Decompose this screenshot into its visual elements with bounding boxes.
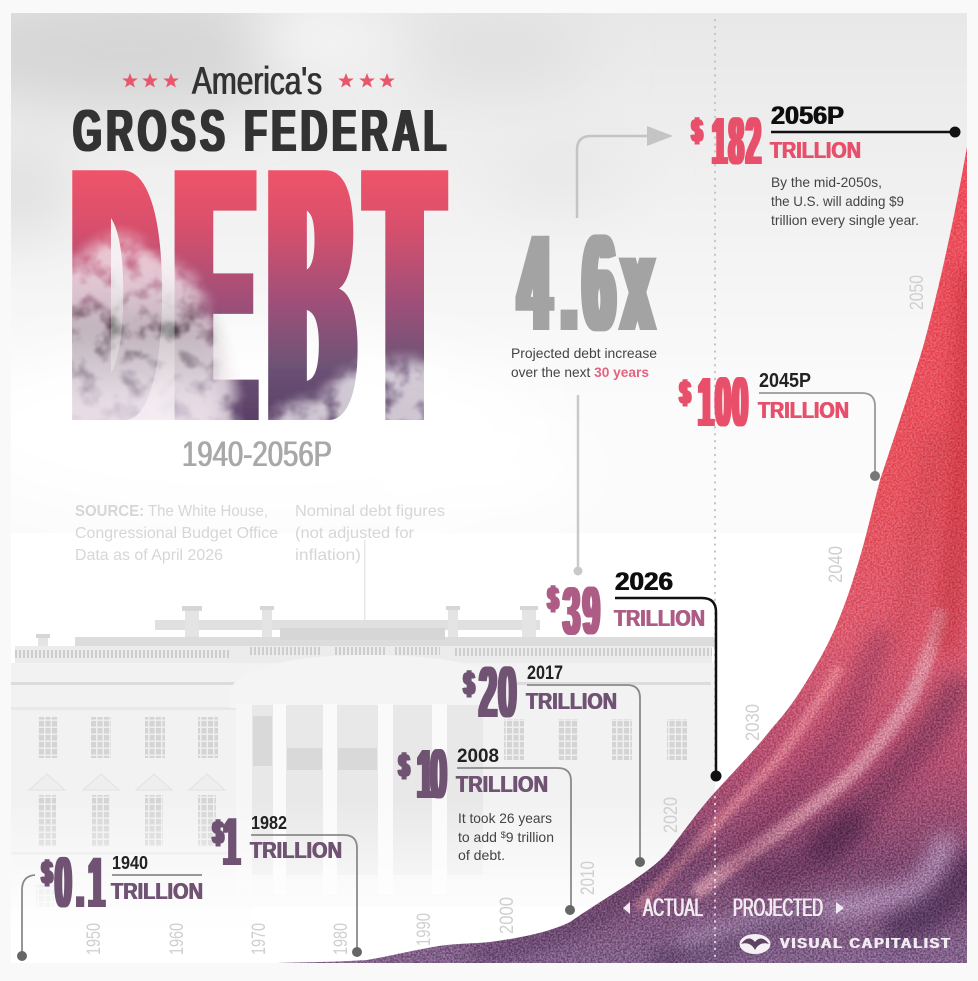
data point: 2045P: $ [680,374,690,411]
data point: 2026: $ [548,580,558,617]
divider: actual vs projected dotted line [714,20,716,962]
subtitle: date range: 1940-2056P [182,435,332,474]
axis year labels: 2020 [661,797,682,833]
logo: visual capitalist: VISUAL CAPITALIST [780,936,950,952]
axis year labels: 1980 [331,923,352,955]
nominal figures note: (not adjusted for [295,525,415,542]
data point: 1940: 0.1 [55,843,105,923]
data point: 2008: 10 [417,735,447,814]
heading: DEBT: DEBT [77,91,438,497]
data point: 2056P: trillion every single year. [771,212,919,228]
data point: 2008: of debt. [458,847,505,863]
data point: 2008: TRILLION [456,771,548,797]
title block [72,66,448,466]
data point: 1940: TRILLION [111,878,203,904]
data point: 2026 [548,568,722,782]
icon: right stars [338,73,395,88]
nominal figures note: inflation) [295,547,361,564]
data point: 2056P: 182 [712,104,761,178]
data point: 2056P: By the mid-2050s, [771,174,882,190]
data point: 2008: to add [458,829,497,845]
axis year labels: 2030 [743,704,764,741]
nominal figures note [295,503,445,564]
callout: 4.6x growth with arrow [511,126,673,576]
data point: 2017: 2017 [527,662,563,684]
legend: actual and projected: PROJECTED [733,894,823,922]
data point: 2056P: 2056P [771,102,844,130]
data point: 1940 [17,856,202,961]
data point: 1940: 1940 [112,852,148,873]
data point: 2045P: 100 [698,364,748,442]
caption: over the next 30 years [511,364,649,380]
data point: 2008: 2008 [457,745,499,767]
data point: 2008: It took 26 years [458,810,552,826]
data point: 2008 [399,735,575,915]
data point: 1982: $ [213,814,223,851]
icon: left stars [122,73,179,88]
heading: gross federal: GROSS FEDERAL [73,97,451,164]
data point: 2056P: TRILLION [770,137,861,163]
data point: 2056P [692,102,960,228]
data point: 2026: 39 [563,573,600,649]
data point: 2026: TRILLION [614,605,705,631]
sky background with clouds [11,13,967,264]
nominal figures note: Nominal debt figures [295,503,445,520]
axis year labels: 2000 [497,897,518,934]
data point: 2008: $ [399,747,409,784]
axis year labels: 1990 [414,913,435,946]
caption: Projected debt increase [511,345,657,361]
axis year labels: 2050 [907,275,928,310]
source note: Congressional Budget Office [75,525,278,542]
data point: 2017: $ [464,665,474,702]
axis year labels: 1950 [84,923,105,955]
debt mountain chart area [270,140,975,970]
data point: 2045P [680,364,880,481]
data point: 2017: TRILLION [526,688,617,714]
caption [511,345,657,380]
data point: 2026: 2026 [615,568,673,596]
legend: actual and projected: ACTUAL [643,894,703,922]
data point: 2045P: 2045P [759,370,811,392]
data point: 1982 [213,804,362,957]
axis year labels: 2010 [578,861,599,895]
logo: visual capitalist [740,934,950,954]
source note [75,503,278,564]
data point: 1940: $ [42,854,52,891]
axis year labels: 1970 [249,923,270,955]
data point: 2008: 9 trillion [506,829,554,845]
data point: 2008: $ [501,830,506,840]
axis year labels [84,275,928,955]
data point: 1982: TRILLION [250,837,342,863]
white house illustration [11,540,715,906]
axis year labels: 2040 [826,546,847,583]
connector to 2026 [574,395,582,576]
source note: Data as of April 2026 [75,547,223,564]
heading: America's: America's [192,60,322,103]
source note: SOURCE: The White House, [75,503,268,520]
arrow: to 2056 [577,126,673,218]
data point: 2056P: $ [692,112,702,149]
data point: 1982: 1 [223,804,240,880]
clouds over DEBT lettering [72,226,424,420]
big number 4.6x: 4.6x [519,207,653,360]
data point: 2045P: TRILLION [758,397,849,423]
axis year labels: 1960 [167,923,188,955]
data point: 1982: 1982 [251,812,287,833]
data point: 2017: 20 [479,651,516,732]
legend: actual and projected [623,898,844,916]
data point: 2056P: the U.S. will adding $9 [771,193,904,209]
data point: 2017 [464,651,645,867]
